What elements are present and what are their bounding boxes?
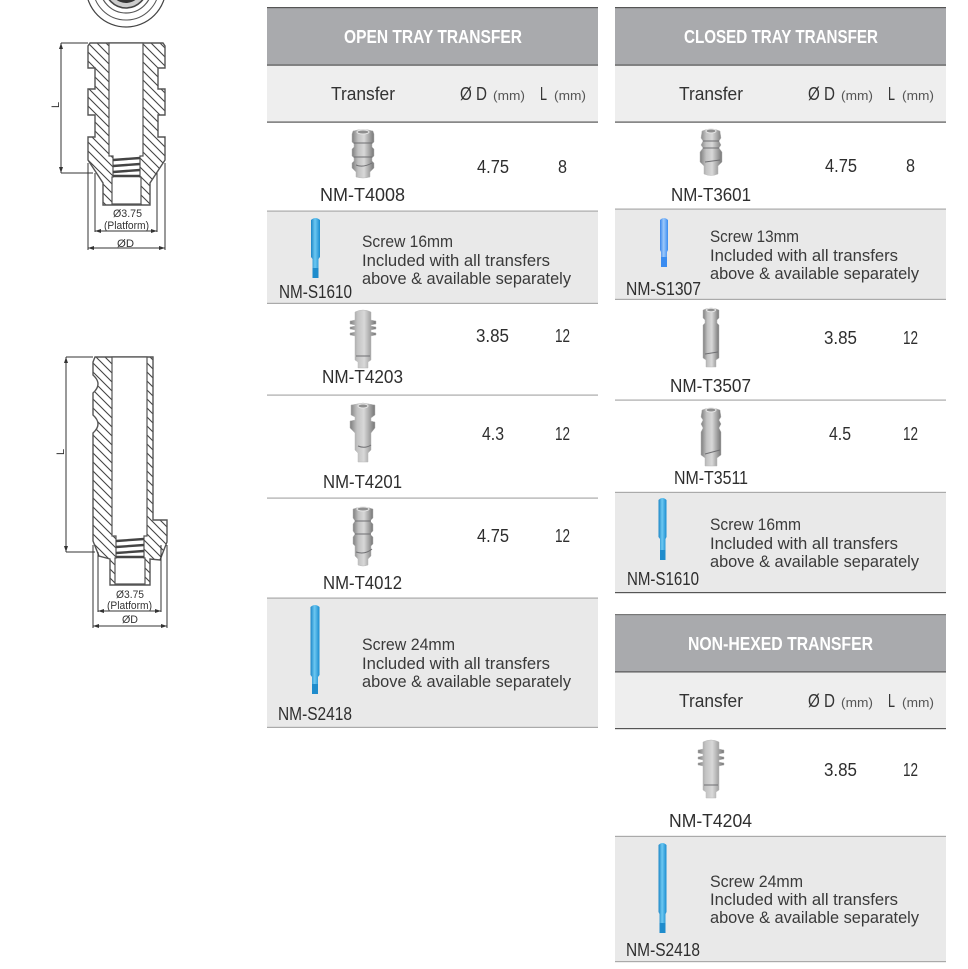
row: NM-T3601: 4.75 xyxy=(825,156,857,176)
row: screw NM-S1610 xyxy=(267,210,598,304)
row: NM-T3601: 8 xyxy=(906,156,915,176)
column headers: Transfer xyxy=(331,84,395,104)
column headers: Ø D xyxy=(808,84,835,104)
panel: non-hexed transfer table xyxy=(615,614,946,962)
row: screw NM-S2418: above & available separately xyxy=(362,673,572,691)
row: NM-T4201 xyxy=(267,394,598,492)
column headers xyxy=(615,671,946,729)
row: NM-T4201: NM-T4201 xyxy=(323,472,402,492)
row: NM-T4203 xyxy=(322,310,570,387)
diagram: open tray transfer cross-section: (Platform) xyxy=(104,220,149,232)
row: screw NM-S1307 xyxy=(615,208,946,300)
column headers: L xyxy=(540,84,547,104)
row: NM-T3511 xyxy=(615,400,946,488)
row: NM-T3601: NM-T3601 xyxy=(671,185,751,205)
heading: closed tray transfer xyxy=(615,7,946,65)
row: NM-T4204: NM-T4204 xyxy=(669,811,752,831)
diagram: closed tray transfer cross-section: Ø3.75 xyxy=(116,589,144,601)
row: screw NM-S1307: Screw 13mm xyxy=(710,228,799,246)
panel: closed tray transfer table xyxy=(615,7,946,593)
heading: non-hexed transfer: NON-HEXED TRANSFER xyxy=(688,633,873,654)
row: screw NM-S1610: Screw 16mm xyxy=(710,516,801,534)
column headers: Transfer xyxy=(679,84,743,104)
row: screw NM-S1307: NM-S1307 xyxy=(626,279,701,299)
row: NM-T3507: 3.85 xyxy=(824,328,857,348)
row: screw NM-S2418 xyxy=(267,598,598,728)
row: NM-T4203: NM-T4203 xyxy=(322,367,403,387)
row: NM-T4203: 3.85 xyxy=(476,326,509,346)
row: screw NM-S2418: Screw 24mm xyxy=(710,873,803,891)
row: screw NM-S1610: Included with all transfers xyxy=(362,252,550,270)
column headers xyxy=(615,64,946,123)
row: NM-T4012: NM-T4012 xyxy=(323,573,402,593)
column headers: (mm) xyxy=(493,88,525,103)
row: NM-T3507: NM-T3507 xyxy=(670,376,751,396)
column headers: (mm) xyxy=(554,88,586,103)
row: NM-T4204: 12 xyxy=(903,760,918,780)
heading: non-hexed transfer xyxy=(615,614,946,672)
column headers: (mm) xyxy=(841,695,873,710)
row: NM-T3507: 12 xyxy=(903,328,918,348)
row: NM-T4012: 4.75 xyxy=(477,526,509,546)
heading: open tray transfer: OPEN TRAY TRANSFER xyxy=(344,26,522,47)
icon: screw xyxy=(660,218,668,267)
row: screw NM-S1610: Screw 16mm xyxy=(362,233,453,251)
row: NM-T4012: 12 xyxy=(555,526,570,546)
row: screw NM-S1610: NM-S1610 xyxy=(627,569,699,589)
diagram: closed tray transfer cross-section: (Platform) xyxy=(107,600,152,612)
row: NM-T4008 xyxy=(320,130,567,205)
panel: open tray transfer table xyxy=(267,7,598,728)
column headers: Ø D xyxy=(460,84,487,104)
column headers: (mm) xyxy=(841,88,873,103)
column headers: L xyxy=(888,691,895,711)
diagram: open tray transfer cross-section: Ø3.75 xyxy=(113,208,142,220)
row: NM-T4204 xyxy=(669,740,918,831)
row: NM-T4012 xyxy=(267,498,598,593)
row: screw NM-S2418: Included with all transfers xyxy=(362,655,550,673)
row: NM-T4204: 3.85 xyxy=(824,760,857,780)
diagram: closed tray transfer cross-section: L xyxy=(55,449,67,455)
diagram: open tray transfer cross-section: L xyxy=(50,102,62,108)
row: screw NM-S1610: Included with all transfers xyxy=(710,535,898,553)
icon: screw xyxy=(658,843,666,933)
column headers: Transfer xyxy=(679,691,743,711)
column headers: (mm) xyxy=(902,695,934,710)
row: screw NM-S2418: NM-S2418 xyxy=(278,704,352,724)
icon: top view of transfer xyxy=(86,0,166,27)
row: screw NM-S1610: NM-S1610 xyxy=(279,282,352,302)
heading: open tray transfer xyxy=(267,7,598,65)
row: NM-T4201: 4.3 xyxy=(482,424,504,444)
row: NM-T3511: 12 xyxy=(903,424,918,444)
row: screw NM-S2418: NM-S2418 xyxy=(626,940,700,960)
row: screw NM-S2418: Included with all transfers xyxy=(710,891,898,909)
row: screw NM-S1610: above & available separately xyxy=(710,553,920,571)
diagram: closed tray transfer cross-section xyxy=(55,357,167,628)
column headers: Ø D xyxy=(808,691,835,711)
row: NM-T4201: 12 xyxy=(555,424,570,444)
icon: screw xyxy=(310,605,320,694)
row: NM-T3601 xyxy=(671,129,915,205)
row: NM-T4008: 8 xyxy=(558,157,567,177)
row: NM-T3511: NM-T3511 xyxy=(674,468,748,488)
column headers: L xyxy=(888,84,895,104)
row: NM-T4008: 4.75 xyxy=(477,157,509,177)
diagram: open tray transfer cross-section: ØD xyxy=(117,238,134,250)
row: screw NM-S2418: above & available separately xyxy=(710,909,920,927)
row: NM-T4008: NM-T4008 xyxy=(320,185,405,205)
heading: closed tray transfer: CLOSED TRAY TRANSFER xyxy=(684,26,878,47)
row: screw NM-S2418: Screw 24mm xyxy=(362,636,455,654)
row: NM-T3507 xyxy=(670,308,918,396)
column headers: (mm) xyxy=(902,88,934,103)
row: screw NM-S1307: Included with all transfers xyxy=(710,247,898,265)
row: screw NM-S2418 xyxy=(615,836,946,962)
diagram: closed tray transfer cross-section: ØD xyxy=(122,614,138,626)
row: screw NM-S1307: above & available separately xyxy=(710,265,920,283)
icon: screw xyxy=(658,498,666,560)
row: NM-T4203: 12 xyxy=(555,326,570,346)
diagram: open tray transfer cross-section xyxy=(50,43,165,250)
row: NM-T3511: 4.5 xyxy=(829,424,851,444)
row: screw NM-S1610: above & available separately xyxy=(362,270,572,288)
icon: screw xyxy=(311,218,320,278)
column headers xyxy=(267,64,598,123)
row: screw NM-S1610 xyxy=(615,492,946,593)
